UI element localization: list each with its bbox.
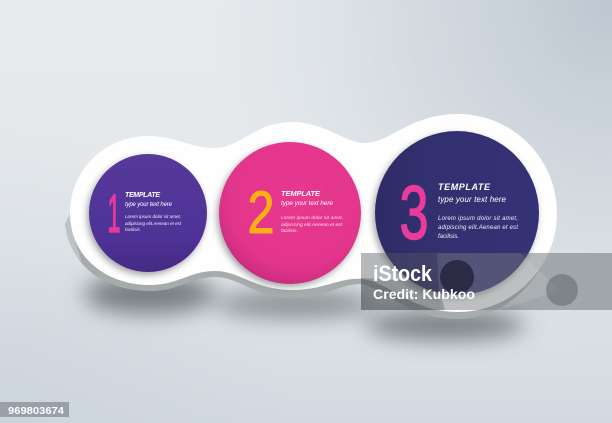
step 1 body text: Lorem ipsum dolor sit amet,	[125, 214, 181, 219]
step 1 heading: TEMPLATE	[125, 192, 160, 199]
step 2 body text	[281, 215, 343, 234]
blob fold wedge	[65, 214, 82, 262]
panel: step 3 circle	[375, 131, 539, 295]
watermark shapes	[437, 253, 560, 310]
step 1 body text: facilisis.	[125, 227, 141, 232]
step 3 body text: adipiscing elit.Aenean et est	[438, 225, 518, 231]
step 2 body text: adipiscing elit.Aenean et est	[281, 222, 343, 228]
watermark band	[361, 253, 612, 310]
step 2 subheading: type your text here	[281, 200, 333, 207]
step 2 body text: Lorem ipsum dolor sit amet,	[281, 215, 343, 221]
circle shadows	[87, 134, 537, 298]
step 1 subheading: type your text here	[125, 202, 173, 208]
step 1 body text: adipiscing elit.Aenean et est	[125, 221, 182, 226]
number 2: 2	[248, 179, 274, 246]
panel: step 2 circle	[219, 142, 361, 284]
blob extrusion edge	[68, 200, 554, 319]
step 3 body text: facilisis.	[438, 234, 459, 240]
panel: step 1 circle: 1	[108, 184, 120, 244]
drop shadow under blob	[84, 274, 525, 340]
step 2 heading: TEMPLATE	[281, 189, 321, 198]
image id tag	[0, 402, 69, 417]
white blob	[70, 114, 557, 312]
step 2 body text: facilisis.	[281, 228, 298, 234]
image id tag: 969803674	[8, 406, 64, 417]
step 3 subheading: type your text here	[438, 195, 507, 204]
step 3 heading: TEMPLATE	[438, 182, 491, 192]
panel: step 1 circle	[89, 154, 207, 272]
iStock logo text: iStock	[373, 261, 433, 286]
number 3: 3	[400, 171, 428, 256]
step 3 body text: Lorem ipsum dolor sit amet,	[438, 216, 518, 222]
step 1 body text	[125, 214, 182, 232]
step 3 body text	[438, 216, 518, 240]
credit text: Credit: Kubkoo	[373, 286, 475, 302]
